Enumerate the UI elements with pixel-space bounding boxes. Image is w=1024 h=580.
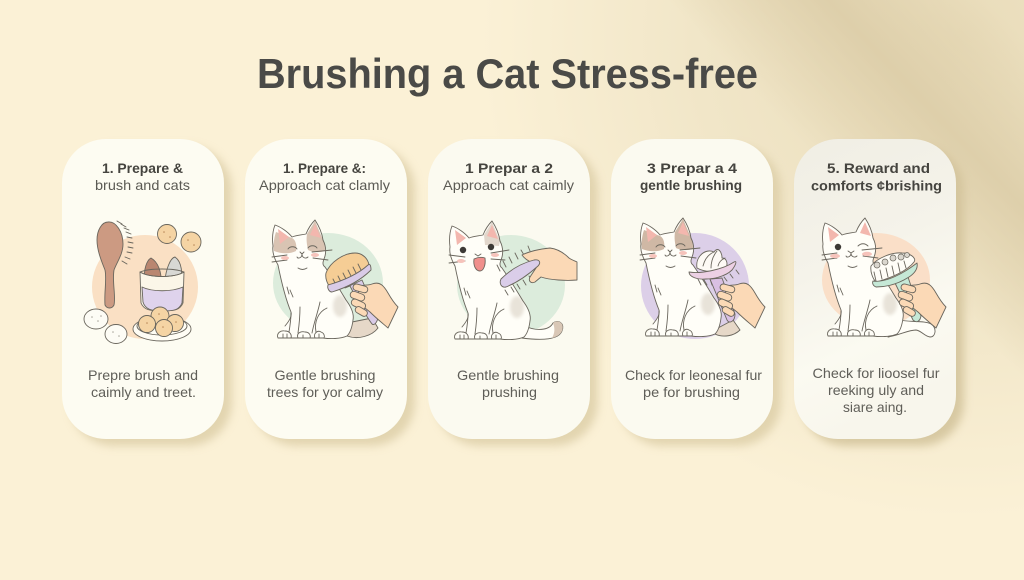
step 5 text [812, 365, 940, 415]
step 4 text [625, 367, 762, 400]
title: Brushing a Cat Stress-free [257, 50, 758, 97]
step 3 heading: Approach cat caimly [443, 177, 574, 193]
step 2 heading [259, 160, 390, 193]
step 1 heading [95, 160, 190, 193]
step 3 text [457, 367, 559, 400]
step 3 text: prushing [482, 384, 537, 400]
step 3 heading [443, 160, 574, 193]
step 5 heading: comforts ¢brishing [811, 178, 942, 194]
panel: step 2 approach [245, 139, 415, 446]
step 1 heading: 1. Prepare & [102, 160, 183, 176]
step 2 text: Gentle brushing [274, 367, 376, 383]
panel: step 1 prepare [62, 139, 232, 446]
panel: step 3 gentle brushing [428, 139, 598, 446]
icon: happy cat with lavender brush [449, 221, 577, 340]
step 1 heading: brush and cats [95, 177, 190, 193]
step 2 text: trees for yor calmy [267, 384, 383, 400]
panel: step 4 check for loose fur [611, 139, 781, 446]
step 4 text: pe for brushing [643, 384, 740, 400]
step 3 heading: 1 Prepar a 2 [465, 160, 553, 176]
step 5 heading: 5. Reward and [827, 160, 930, 176]
step 1 text: Prepre brush and [88, 367, 198, 383]
step 4 heading [640, 160, 742, 193]
icon: brush, jar and treats [84, 221, 201, 344]
step 2 text [267, 367, 383, 400]
step 4 heading: gentle brushing [640, 177, 742, 193]
step 4 text: Check for leonesal fur [625, 367, 762, 383]
step 4 heading: 3 Prepar a 4 [647, 160, 737, 176]
step 2 heading: 1. Prepare &: [283, 160, 366, 176]
step 5 text: reeking uly and [828, 382, 924, 398]
icon: winking white cat with mint brush [822, 218, 946, 337]
step 1 text: caimly and treet. [91, 384, 196, 400]
step 2 heading: Approach cat clamly [259, 177, 390, 193]
step 5 text: Check for lioosel fur [812, 365, 940, 381]
icon: cat with pink brush full of fur [640, 218, 765, 339]
step 1 text [88, 367, 198, 400]
step 5 heading [811, 160, 942, 194]
icon: smiling cat with peach brush [272, 220, 398, 339]
step 5 text: siare aing. [843, 399, 907, 415]
panel: step 5 reward and comfort [794, 139, 964, 446]
step 3 text: Gentle brushing [457, 367, 559, 383]
